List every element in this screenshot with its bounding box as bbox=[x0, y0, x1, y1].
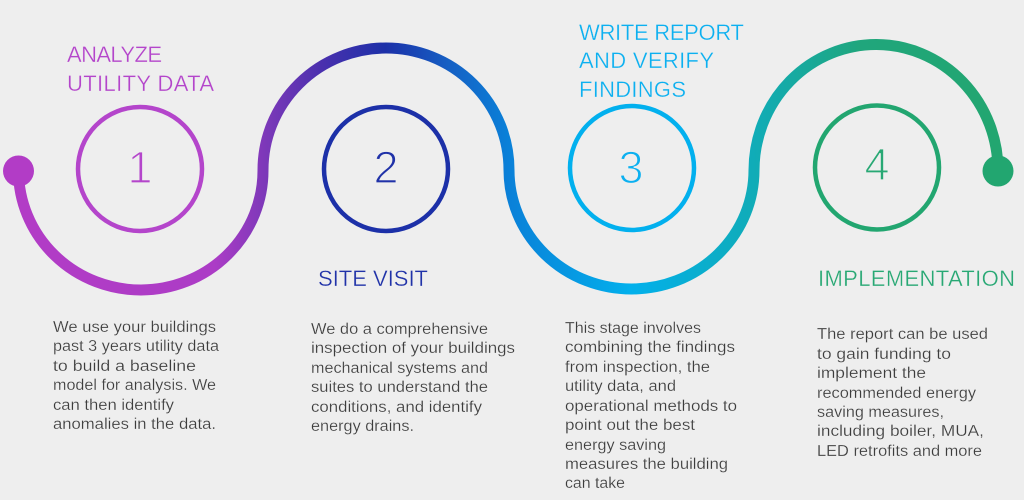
step 3 heading bbox=[579, 20, 744, 102]
step 2 bbox=[311, 107, 515, 435]
step 4 heading: IMPLEMENTATION bbox=[818, 266, 1015, 291]
step 4 description: including boiler, MUA, bbox=[817, 423, 984, 440]
step 3 heading: WRITE REPORT bbox=[579, 20, 744, 45]
step 3 heading: AND VERIFY bbox=[579, 48, 714, 73]
step 3 description: utility data, and bbox=[565, 378, 676, 395]
step 3 bbox=[565, 20, 744, 492]
step 3 description: This stage involves bbox=[565, 320, 701, 337]
step 4 number circle: 4 bbox=[864, 139, 890, 190]
step 4 description: The report can be used bbox=[817, 326, 988, 343]
step 3 description bbox=[565, 320, 737, 492]
step 4 description: to gain funding to bbox=[817, 346, 951, 363]
step 3 description: operational methods to bbox=[565, 398, 737, 415]
step 3 description: combining the findings bbox=[565, 339, 735, 356]
step 3 description: measures the building bbox=[565, 456, 728, 473]
step 1 description: can then identify bbox=[53, 397, 174, 414]
step 1 number circle bbox=[78, 107, 202, 231]
step 1 number circle: 1 bbox=[127, 142, 153, 193]
step 1 description: anomalies in the data. bbox=[53, 416, 216, 433]
step 4 number circle bbox=[815, 106, 939, 230]
step 1 description: past 3 years utility data bbox=[53, 338, 219, 355]
step 2 description: energy drains. bbox=[311, 418, 414, 435]
start dot bbox=[3, 156, 34, 186]
step 3 description: can take bbox=[565, 475, 625, 492]
end dot bbox=[982, 156, 1014, 186]
step 2 heading: SITE VISIT bbox=[318, 266, 428, 291]
step 4 description: saving measures, bbox=[817, 404, 944, 421]
step 3 description: from inspection, the bbox=[565, 359, 710, 376]
step 1 description: model for analysis. We bbox=[53, 377, 216, 394]
step 3 description: energy saving bbox=[565, 437, 666, 454]
step 4 description: LED retrofits and more bbox=[817, 443, 982, 460]
step 4 description bbox=[817, 326, 988, 460]
wave connector line bbox=[18, 44, 998, 290]
step 3 number circle: 3 bbox=[618, 142, 644, 193]
step 2 description: inspection of your buildings bbox=[311, 340, 515, 357]
step 2 number circle bbox=[324, 107, 448, 231]
step 3 heading: FINDINGS bbox=[579, 77, 686, 102]
step 2 number circle: 2 bbox=[373, 142, 399, 193]
step 3 number circle bbox=[570, 106, 694, 230]
step 1 heading: UTILITY DATA bbox=[67, 71, 214, 96]
step 4 description: recommended energy bbox=[817, 385, 976, 402]
step 1 description bbox=[53, 319, 219, 433]
step 4 description: implement the bbox=[817, 365, 926, 382]
step 4 bbox=[815, 106, 1015, 460]
step 2 description: conditions, and identify bbox=[311, 399, 482, 416]
step 1 description: We use your buildings bbox=[53, 319, 216, 336]
step 2 description: We do a comprehensive bbox=[311, 321, 488, 338]
step 1 bbox=[53, 42, 219, 433]
step 3 description: point out the best bbox=[565, 417, 696, 434]
step 1 heading: ANALYZE bbox=[67, 42, 162, 67]
step 2 description bbox=[311, 321, 515, 435]
step 2 description: mechanical systems and bbox=[311, 360, 488, 377]
step 1 heading bbox=[67, 42, 214, 96]
step 1 description: to build a baseline bbox=[53, 358, 196, 375]
step 2 description: suites to understand the bbox=[311, 379, 488, 396]
